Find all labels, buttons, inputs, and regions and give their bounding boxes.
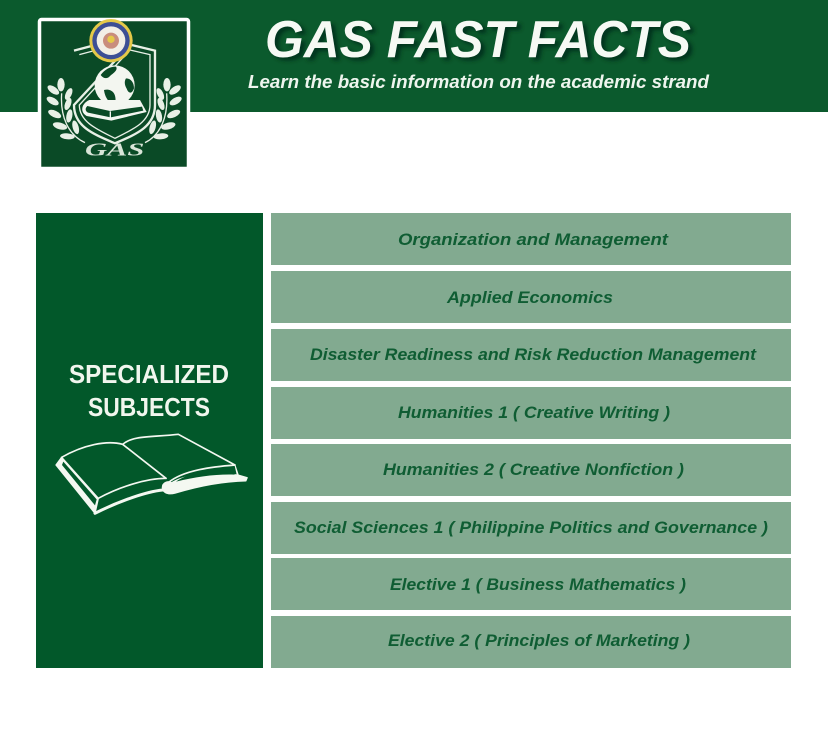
logo: [40, 19, 188, 168]
logo laurel right: [145, 78, 183, 143]
logo GAS lettering: GAS: [85, 139, 144, 159]
subtitle: Learn the basic information on the academic strand: [248, 72, 710, 92]
icon: open book: [56, 434, 247, 513]
row 3: Disaster Readiness and Risk Reduction Management: [310, 345, 757, 364]
logo seal: [89, 19, 133, 62]
row 4: Humanities 1 ( Creative Writing ): [398, 403, 670, 422]
row 6: Social Sciences 1 ( Philippine Politics and Governance ): [294, 518, 768, 537]
logo shield: [74, 45, 155, 143]
heading: SUBJECTS: [88, 392, 210, 422]
row 2: [271, 271, 791, 323]
row 7: Elective 1 ( Business Mathematics ): [390, 575, 686, 594]
logo book: [82, 100, 147, 121]
row 5: [271, 444, 791, 496]
heading: [69, 359, 229, 422]
header banner: [0, 0, 828, 112]
title: GAS FAST FACTS: [265, 11, 691, 69]
row 6: [271, 502, 791, 554]
row 3: [271, 329, 791, 381]
row 1: Organization and Management: [398, 230, 669, 249]
list: subject rows: [271, 213, 791, 668]
title: GAS FAST FACTS: [269, 14, 695, 72]
logo globe: [95, 65, 135, 105]
logo laurel left: [45, 78, 85, 143]
row 8: [271, 616, 791, 668]
row 5: Humanities 2 ( Creative Nonfiction ): [383, 460, 684, 479]
row 1: [271, 213, 791, 265]
logo frame: [40, 20, 188, 168]
row 8: Elective 2 ( Principles of Marketing ): [388, 631, 690, 650]
panel: specialized subjects: [36, 213, 263, 668]
row 4: [271, 387, 791, 439]
heading: SPECIALIZED: [69, 359, 229, 389]
row 7: [271, 558, 791, 610]
row 2: Applied Economics: [446, 288, 613, 307]
